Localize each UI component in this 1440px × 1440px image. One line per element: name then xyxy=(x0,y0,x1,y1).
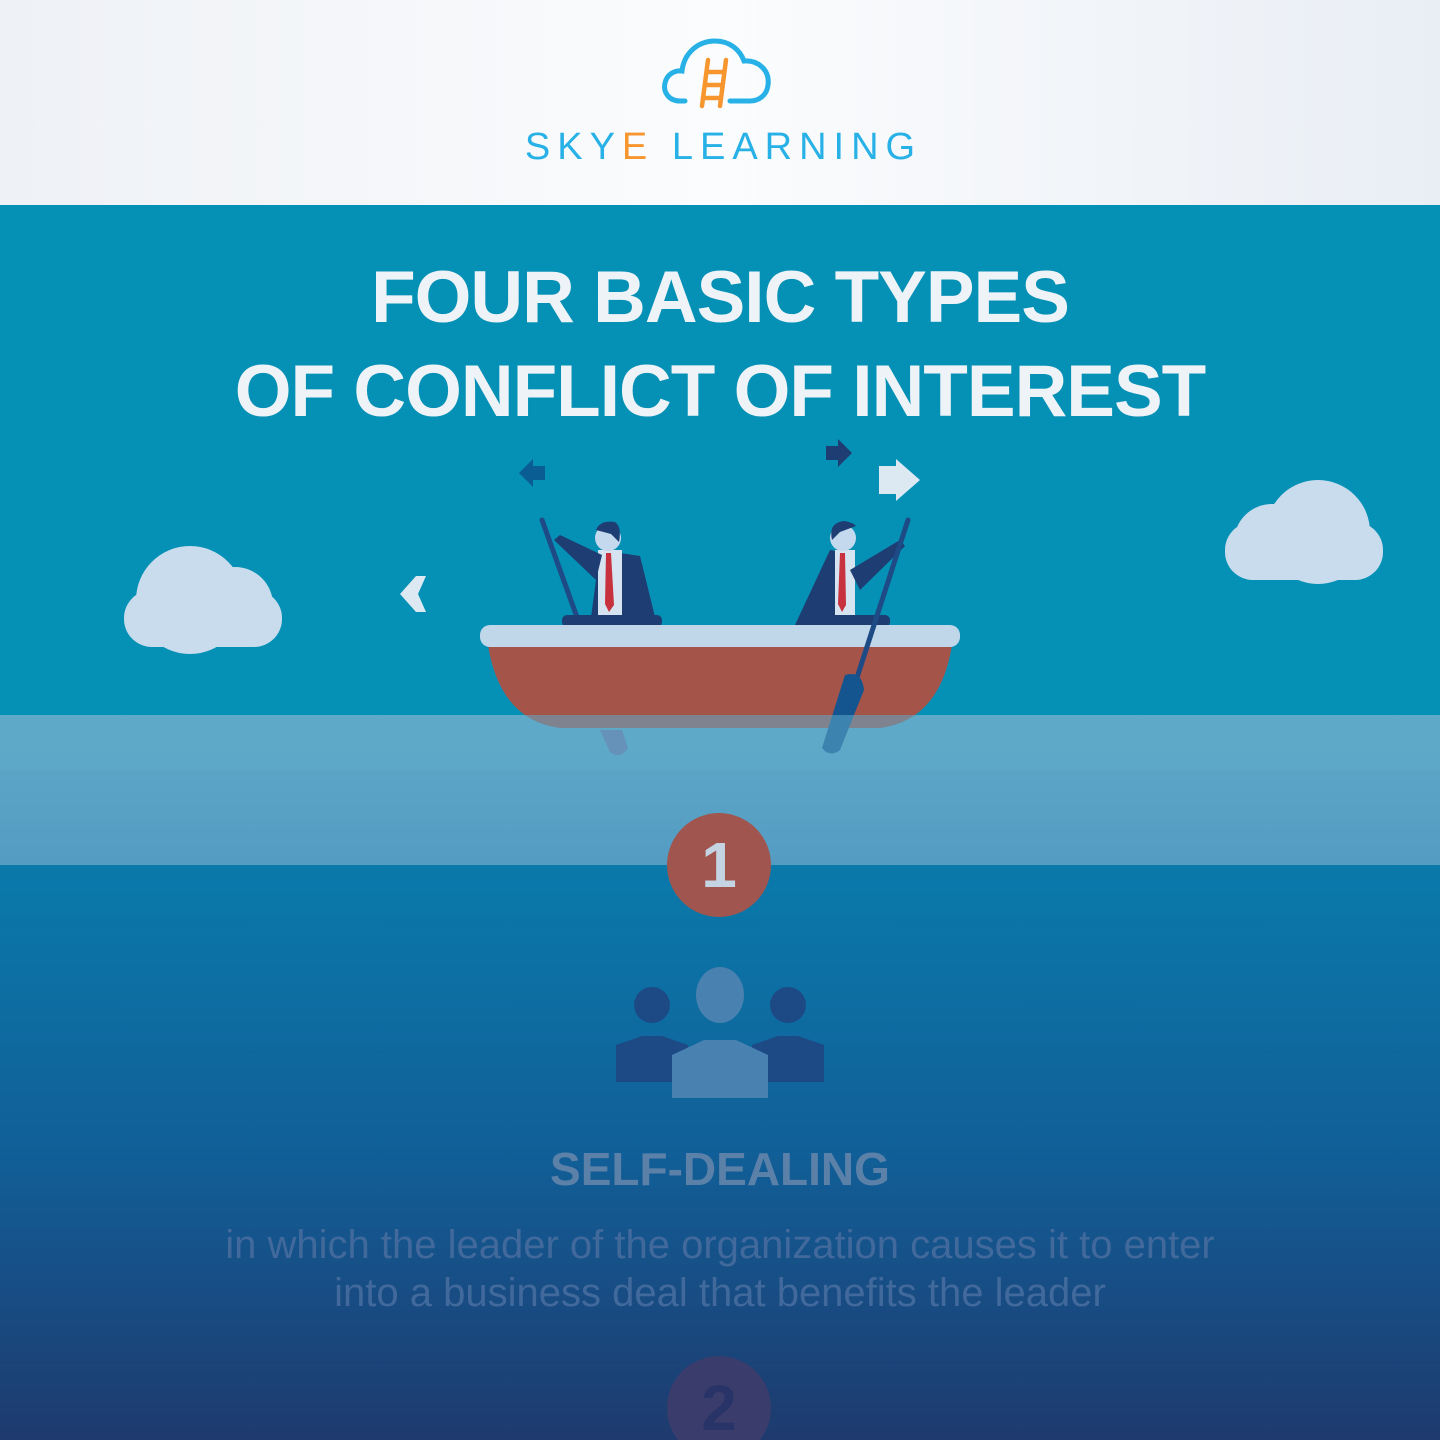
logo text: SKYE LEARNING xyxy=(525,126,922,168)
sky background xyxy=(0,205,1440,715)
underwater overlay xyxy=(0,715,1440,770)
description xyxy=(225,1223,1215,1315)
illustration: two businessmen rowing a boat xyxy=(124,439,1383,756)
cloud right xyxy=(1225,480,1383,584)
boat hull xyxy=(488,645,952,728)
heading: self-dealing: SELF-DEALING xyxy=(550,1143,890,1195)
right oar xyxy=(853,520,908,690)
title xyxy=(235,257,1206,432)
badge 1: 1 xyxy=(701,829,737,901)
title: OF CONFLICT OF INTEREST xyxy=(235,351,1205,432)
water surface band xyxy=(0,715,1440,865)
icon: cloud with ladder xyxy=(662,38,771,108)
badge 1 xyxy=(667,813,771,917)
logo xyxy=(525,38,922,168)
title: FOUR BASIC TYPES xyxy=(371,257,1069,338)
header background xyxy=(0,0,1440,205)
cloud left xyxy=(124,546,282,654)
icon: three businessmen xyxy=(616,967,824,1098)
description: in which the leader of the organization causes it to enter xyxy=(225,1223,1215,1267)
arrows xyxy=(519,459,545,487)
badge 2 xyxy=(667,1356,771,1440)
deep water background xyxy=(0,865,1440,1440)
left man xyxy=(542,520,662,627)
right man xyxy=(795,521,905,627)
description: into a business deal that benefits the leader xyxy=(334,1271,1106,1315)
